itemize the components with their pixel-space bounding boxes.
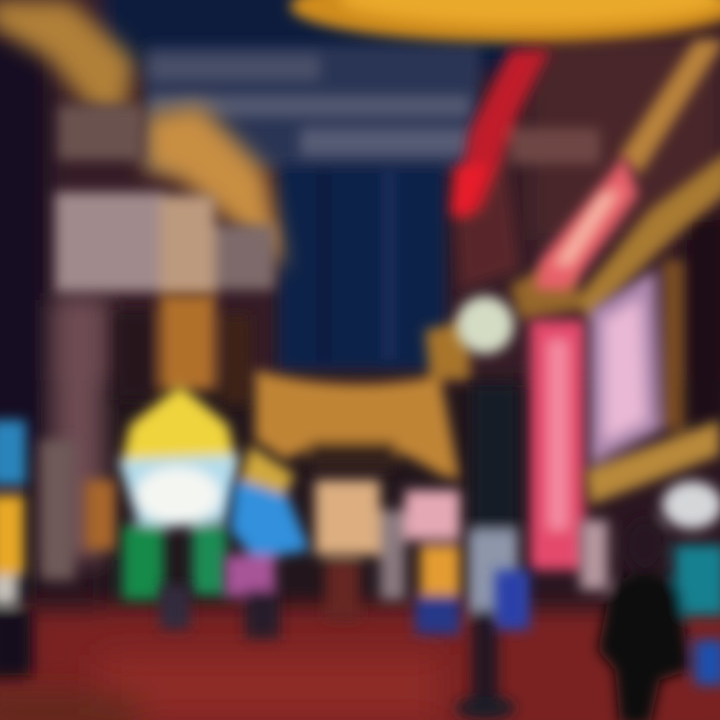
yellow character xyxy=(118,385,240,600)
right machine and silhouette xyxy=(580,481,720,720)
navy banner panel xyxy=(145,45,480,370)
pink neon sign xyxy=(530,155,638,570)
gold pillar xyxy=(115,295,250,405)
middle characters xyxy=(315,480,530,635)
left machines xyxy=(0,420,115,675)
blue character xyxy=(160,445,310,640)
right gold beams xyxy=(510,40,720,320)
right poster xyxy=(585,260,720,505)
lamp post xyxy=(455,296,518,720)
banner text blur bands xyxy=(150,55,470,156)
gold beams top left xyxy=(0,0,285,270)
gold ceiling ellipse xyxy=(290,0,720,42)
central gold arch xyxy=(255,320,470,480)
red ribbon xyxy=(450,50,600,290)
left pale sign panel xyxy=(55,105,275,295)
red carpet shading xyxy=(0,655,440,720)
